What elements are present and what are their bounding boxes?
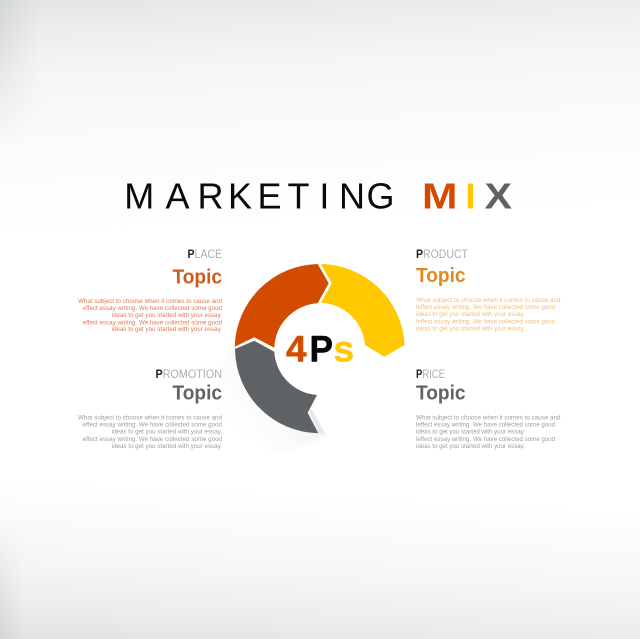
heading: Topic bbox=[416, 382, 466, 404]
panel: promotion bbox=[78, 369, 222, 450]
body text: leffect essay writing. We have collected some good bbox=[416, 304, 555, 311]
body text: effect essay writing. We have collected some good bbox=[83, 436, 222, 443]
center label: 4 bbox=[286, 329, 307, 370]
body text: ideas to get you started with your essay. bbox=[112, 428, 222, 436]
body text: leffect essay writing. We have collected some good bbox=[416, 436, 555, 443]
body text bbox=[78, 414, 222, 450]
donut chart bbox=[212, 264, 405, 452]
body text: ideas to get you started with your essay. bbox=[416, 428, 525, 436]
body text: leffect essay writing. We have collected some good bbox=[416, 318, 555, 326]
body text bbox=[78, 298, 222, 333]
body text: ideas to get you started with your essay. bbox=[416, 443, 525, 450]
panel: price bbox=[416, 369, 560, 450]
segment: product bbox=[321, 264, 405, 357]
title bbox=[124, 175, 512, 216]
body text bbox=[416, 297, 560, 332]
body text: ideas to get you started with your essay. bbox=[112, 312, 222, 319]
body text: ideas to get you started with your essay. bbox=[416, 311, 525, 318]
body text: ideas to get you started with your essay. bbox=[112, 326, 222, 333]
body text: effect essay writing. We have collected some good bbox=[83, 305, 222, 312]
title: X bbox=[484, 176, 512, 216]
title: I bbox=[466, 176, 476, 216]
center label bbox=[286, 329, 354, 370]
body text: ideas to get you started with your essay. bbox=[416, 326, 525, 332]
body text: What subject to choose when it comes to cause and bbox=[416, 297, 560, 304]
body text: effect essay writing. We have collected some good bbox=[83, 320, 222, 326]
body text: What subject to choose when it comes to cause and bbox=[416, 414, 560, 422]
body text: leffect essay writing. We have collected some good bbox=[416, 422, 555, 428]
notch highlight bbox=[309, 409, 325, 434]
segment: place bbox=[235, 264, 329, 348]
body text: ideas to get you started with your essay. bbox=[112, 443, 222, 450]
body text bbox=[416, 414, 560, 450]
segment: promotion bbox=[235, 341, 318, 433]
title: MARKETING bbox=[124, 175, 395, 216]
body text: What subject to choose when it comes to cause and bbox=[78, 298, 222, 305]
body text: effect essay writing. We have collected some good bbox=[83, 422, 222, 428]
heading: Topic bbox=[416, 264, 466, 287]
title: M bbox=[422, 176, 458, 216]
body text: What subject to choose when it comes to cause and bbox=[78, 414, 222, 422]
heading: Topic bbox=[172, 266, 222, 288]
drop shadow bbox=[212, 340, 328, 452]
panel: product bbox=[416, 249, 560, 332]
panel: place bbox=[78, 249, 222, 333]
label: PRODUCT bbox=[416, 249, 468, 261]
label: PLACE bbox=[188, 249, 222, 261]
center label: s bbox=[334, 329, 354, 370]
heading: Topic bbox=[172, 382, 222, 404]
center label: P bbox=[310, 329, 333, 370]
label: PRICE bbox=[416, 369, 445, 381]
label: PROMOTION bbox=[156, 369, 222, 381]
